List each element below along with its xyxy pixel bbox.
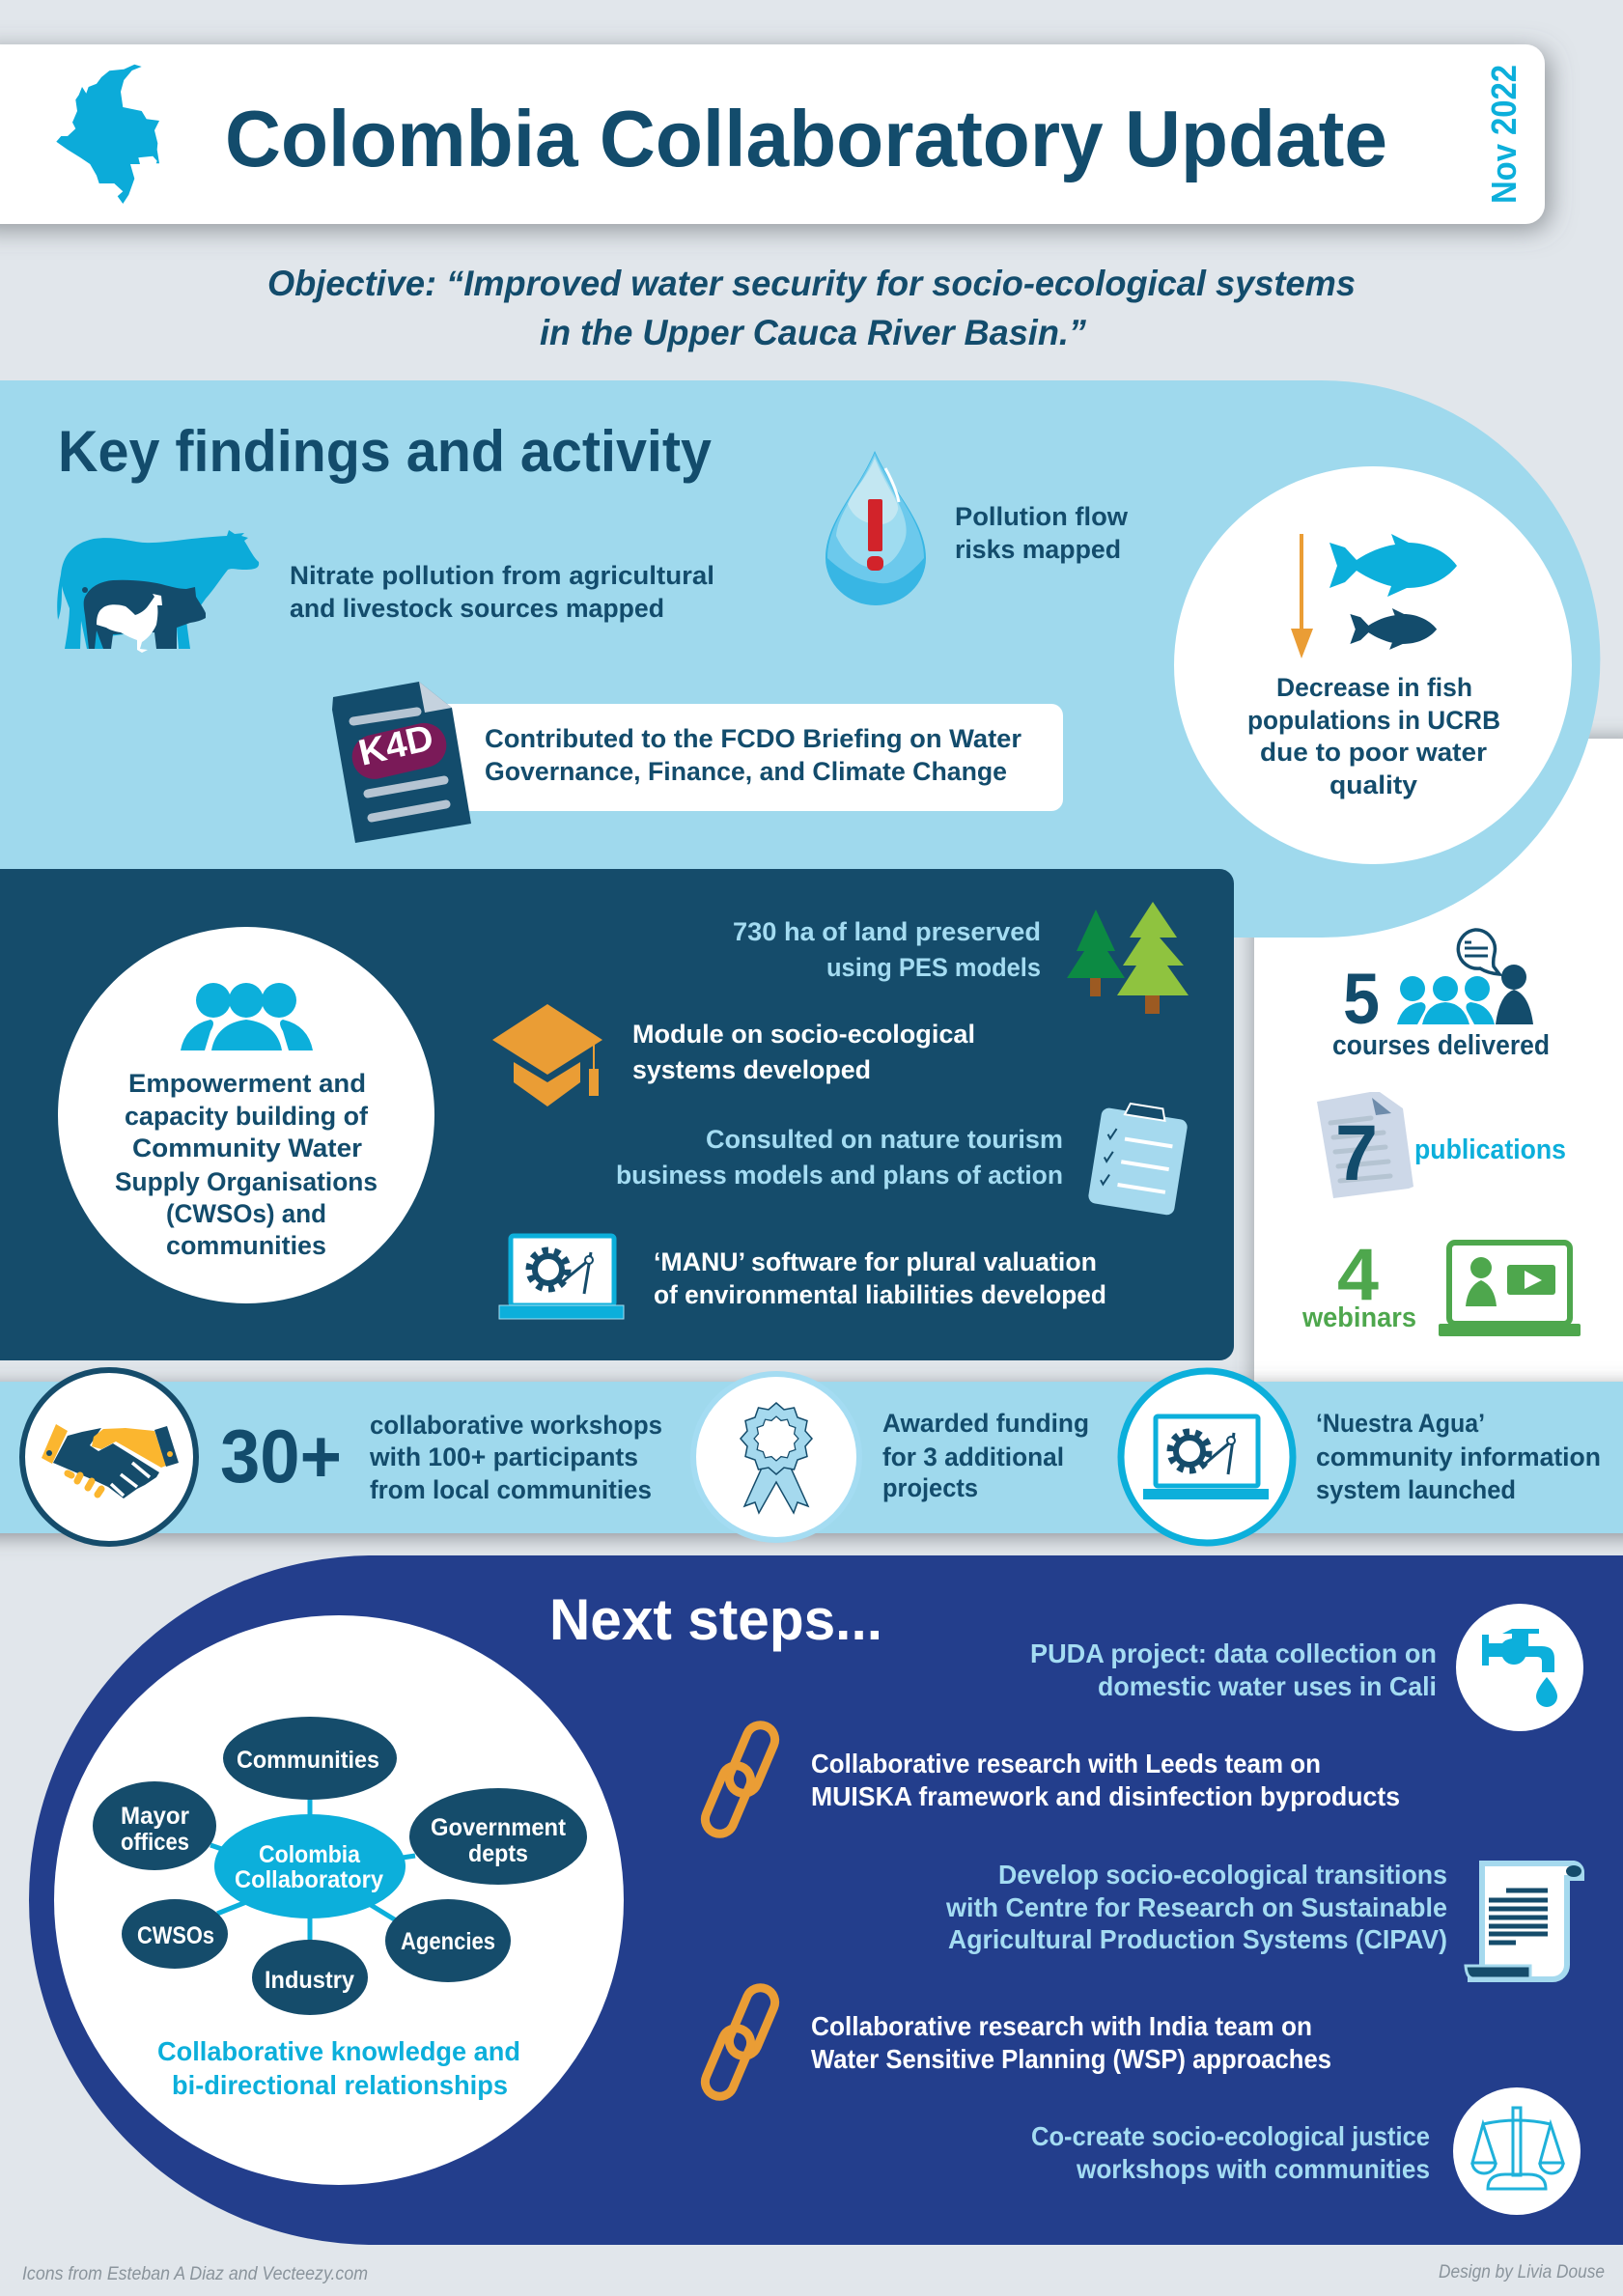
node: mayor offices: offices xyxy=(121,1829,189,1856)
text: nature tourism: business models and plans of action xyxy=(616,1161,1063,1190)
text: MANU software xyxy=(654,1247,1106,1309)
icon: K4D document xyxy=(332,682,471,843)
text: nitrate: and livestock sources mapped xyxy=(290,594,664,623)
text: workshops: from local communities xyxy=(370,1475,652,1504)
panel: outputs on white xyxy=(1254,739,1623,1395)
stat: publications: 7 xyxy=(1335,1109,1378,1197)
text: decrease in fish: due to poor water xyxy=(1260,738,1488,767)
circle: collaboration network xyxy=(54,1615,624,2185)
icon: trees xyxy=(1067,902,1189,1014)
node: agencies xyxy=(385,1899,511,1982)
icon: K4D document: K4D xyxy=(355,717,437,774)
text: module: systems developed xyxy=(632,1055,871,1084)
text: pollution flow xyxy=(955,502,1129,564)
text: module xyxy=(632,1020,975,1084)
callout: FCDO briefing xyxy=(332,682,1063,843)
panel: next steps xyxy=(29,1555,1623,2245)
node: CWSOs: CWSOs xyxy=(137,1922,214,1949)
caption: collaborative knowledge: Collaborative knowledge and xyxy=(157,2036,520,2066)
text: module: Module on socio-ecological xyxy=(632,1020,975,1049)
icon: tap xyxy=(1456,1604,1583,1731)
text: decrease in fish: quality xyxy=(1329,770,1417,799)
text: land preserved: 730 ha of land preserved xyxy=(733,917,1041,946)
text: land preserved xyxy=(733,917,1041,982)
icon: large fish xyxy=(1329,534,1457,597)
icon: chain link xyxy=(701,1983,779,2101)
text: Leeds team: Collaborative research with Leeds team on xyxy=(811,1749,1321,1778)
objective text: Objective: “Improved water security for socio-ecological systems xyxy=(267,264,1356,303)
text: CIPAV: Agricultural Production Systems (CIPAV) xyxy=(948,1924,1447,1954)
stat: courses delivered: 5 xyxy=(1343,959,1380,1039)
icon: scales of justice xyxy=(1453,2087,1581,2215)
stat: courses delivered xyxy=(1332,930,1550,1061)
text: PUDA xyxy=(1030,1638,1437,1701)
text: CIPAV: with Centre for Research on Sustainable xyxy=(945,1892,1447,1922)
node: Colombia Collaboratory xyxy=(214,1814,406,1918)
text: empowerment: (CWSOs) and xyxy=(166,1199,326,1228)
text: empowerment: communities xyxy=(166,1231,326,1260)
heading: key findings: Key findings and activity xyxy=(58,419,713,484)
text: MANU software: of environmental liabilities developed xyxy=(654,1280,1106,1309)
stat: webinars: webinars xyxy=(1301,1302,1416,1333)
text: Leeds team xyxy=(811,1749,1400,1811)
text: empowerment: Community Water xyxy=(132,1134,363,1162)
text: nitrate: Nitrate pollution from agricultural xyxy=(290,561,714,590)
icon: scroll xyxy=(1466,1863,1581,1979)
text: PUDA: domestic water uses in Cali xyxy=(1098,1671,1437,1701)
caption: collaborative knowledge: bi-directional relationships xyxy=(172,2070,508,2100)
text: workshops: with 100+ participants xyxy=(369,1442,638,1471)
node: Colombia Collaboratory: Collaboratory xyxy=(235,1866,383,1893)
text: India team: Water Sensitive Planning (WSP) approaches xyxy=(811,2044,1331,2074)
icon: rosette circle xyxy=(693,1374,859,1540)
icon: clipboard xyxy=(1087,1100,1189,1216)
icon: map of Colombia xyxy=(56,65,159,204)
date: Nov 2022 xyxy=(1484,65,1524,204)
text: pollution flow: risks mapped xyxy=(955,535,1121,564)
panel: achievements band xyxy=(0,1370,1623,1544)
text: workshops: collaborative workshops xyxy=(370,1411,662,1440)
node: communities xyxy=(223,1717,397,1800)
text: CIPAV: Develop socio-ecological transitions xyxy=(998,1860,1447,1890)
stat: 30+: 30+ xyxy=(220,1414,342,1498)
text: Leeds team: MUISKA framework and disinfection byproducts xyxy=(811,1781,1400,1811)
text: funding: projects xyxy=(882,1473,978,1502)
text: empowerment: Supply Organisations xyxy=(115,1167,378,1196)
panel: key findings and activity xyxy=(0,380,1600,938)
circle: fish populations xyxy=(1174,466,1572,864)
text: justice workshops: Co-create socio-ecological justice xyxy=(1031,2121,1430,2151)
node: government depts xyxy=(409,1788,587,1885)
node: mayor offices: Mayor xyxy=(121,1803,189,1830)
objective text xyxy=(267,264,1356,352)
node: CWSOs xyxy=(122,1899,228,1969)
text: funding xyxy=(882,1409,1089,1502)
title: Colombia Collaboratory Update xyxy=(225,94,1387,183)
text: nature tourism xyxy=(616,1125,1063,1190)
stat: courses delivered: courses delivered xyxy=(1332,1030,1550,1061)
text: pollution flow: Pollution flow xyxy=(955,502,1129,531)
text: CIPAV xyxy=(945,1860,1447,1954)
panel: capacity building xyxy=(0,869,1234,1360)
node: agencies: Agencies xyxy=(401,1928,495,1955)
stat: webinars: 4 xyxy=(1337,1234,1379,1316)
icon: handshake circle xyxy=(22,1370,196,1544)
icon: livestock xyxy=(57,530,259,653)
text: MANU software: ‘MANU’ software for plural valuation xyxy=(654,1247,1097,1276)
icon: water drop with warning xyxy=(825,451,926,605)
text: justice workshops xyxy=(1031,2121,1430,2184)
text: nitrate xyxy=(290,561,714,623)
text: decrease in fish: populations in UCRB xyxy=(1247,706,1500,735)
icon: mortarboard xyxy=(492,1004,602,1106)
text: Nuestra Agua: ‘Nuestra Agua’ xyxy=(1316,1409,1485,1438)
node: mayor offices xyxy=(93,1781,216,1870)
text: decrease in fish xyxy=(1247,673,1500,799)
callout: FCDO briefing: Contributed to the FCDO Briefing on Water xyxy=(485,724,1021,753)
stat: publications xyxy=(1317,1092,1566,1198)
node: industry xyxy=(252,1940,368,2015)
text: India team: Collaborative research with India team on xyxy=(811,2011,1312,2041)
callout: FCDO briefing: Governance, Finance, and Climate Change xyxy=(485,757,1007,786)
text: PUDA: PUDA project: data collection on xyxy=(1030,1638,1437,1668)
text: funding: Awarded funding xyxy=(882,1409,1089,1438)
text: land preserved: using PES models xyxy=(826,953,1041,982)
node: industry: Industry xyxy=(265,1967,354,1994)
text: funding: for 3 additional xyxy=(882,1442,1064,1471)
panel: header xyxy=(0,44,1545,224)
stat: webinars xyxy=(1301,1234,1581,1336)
icon: MANU laptop xyxy=(499,1236,624,1319)
footer: design credit: Design by Livia Douse xyxy=(1439,2262,1605,2282)
footer: icon credits: Icons from Esteban A Diaz and Vecteezy.com xyxy=(22,2264,368,2284)
text: Nuestra Agua: system launched xyxy=(1316,1475,1516,1504)
text: justice workshops: workshops with communities xyxy=(1076,2154,1430,2184)
text: India team xyxy=(811,2011,1331,2074)
circle: empowerment xyxy=(58,927,434,1303)
text: empowerment: capacity building of xyxy=(125,1102,369,1131)
icon: chain link xyxy=(701,1721,779,1838)
node: government depts: depts xyxy=(468,1840,528,1867)
caption: collaborative knowledge xyxy=(157,2036,520,2100)
text: Nuestra Agua: community information xyxy=(1316,1442,1601,1471)
icon: small fish xyxy=(1350,608,1437,650)
icon: people xyxy=(181,983,313,1050)
text: decrease in fish: Decrease in fish xyxy=(1276,673,1472,702)
node: government depts: Government xyxy=(431,1814,567,1841)
text: empowerment: Empowerment and xyxy=(128,1069,366,1098)
node: communities: Communities xyxy=(237,1747,379,1774)
text: nature tourism: Consulted on nature tourism xyxy=(706,1125,1063,1154)
text: workshops xyxy=(369,1411,662,1504)
stat: publications: publications xyxy=(1414,1134,1566,1165)
heading: next steps: Next steps... xyxy=(549,1587,882,1652)
text: empowerment xyxy=(115,1069,378,1260)
objective text: in the Upper Cauca River Basin.” xyxy=(540,313,1086,352)
node: Colombia Collaboratory: Colombia xyxy=(259,1841,361,1868)
text: Nuestra Agua xyxy=(1316,1409,1601,1504)
arrow: decrease xyxy=(1291,534,1313,658)
icon: laptop circle xyxy=(1121,1371,1293,1543)
